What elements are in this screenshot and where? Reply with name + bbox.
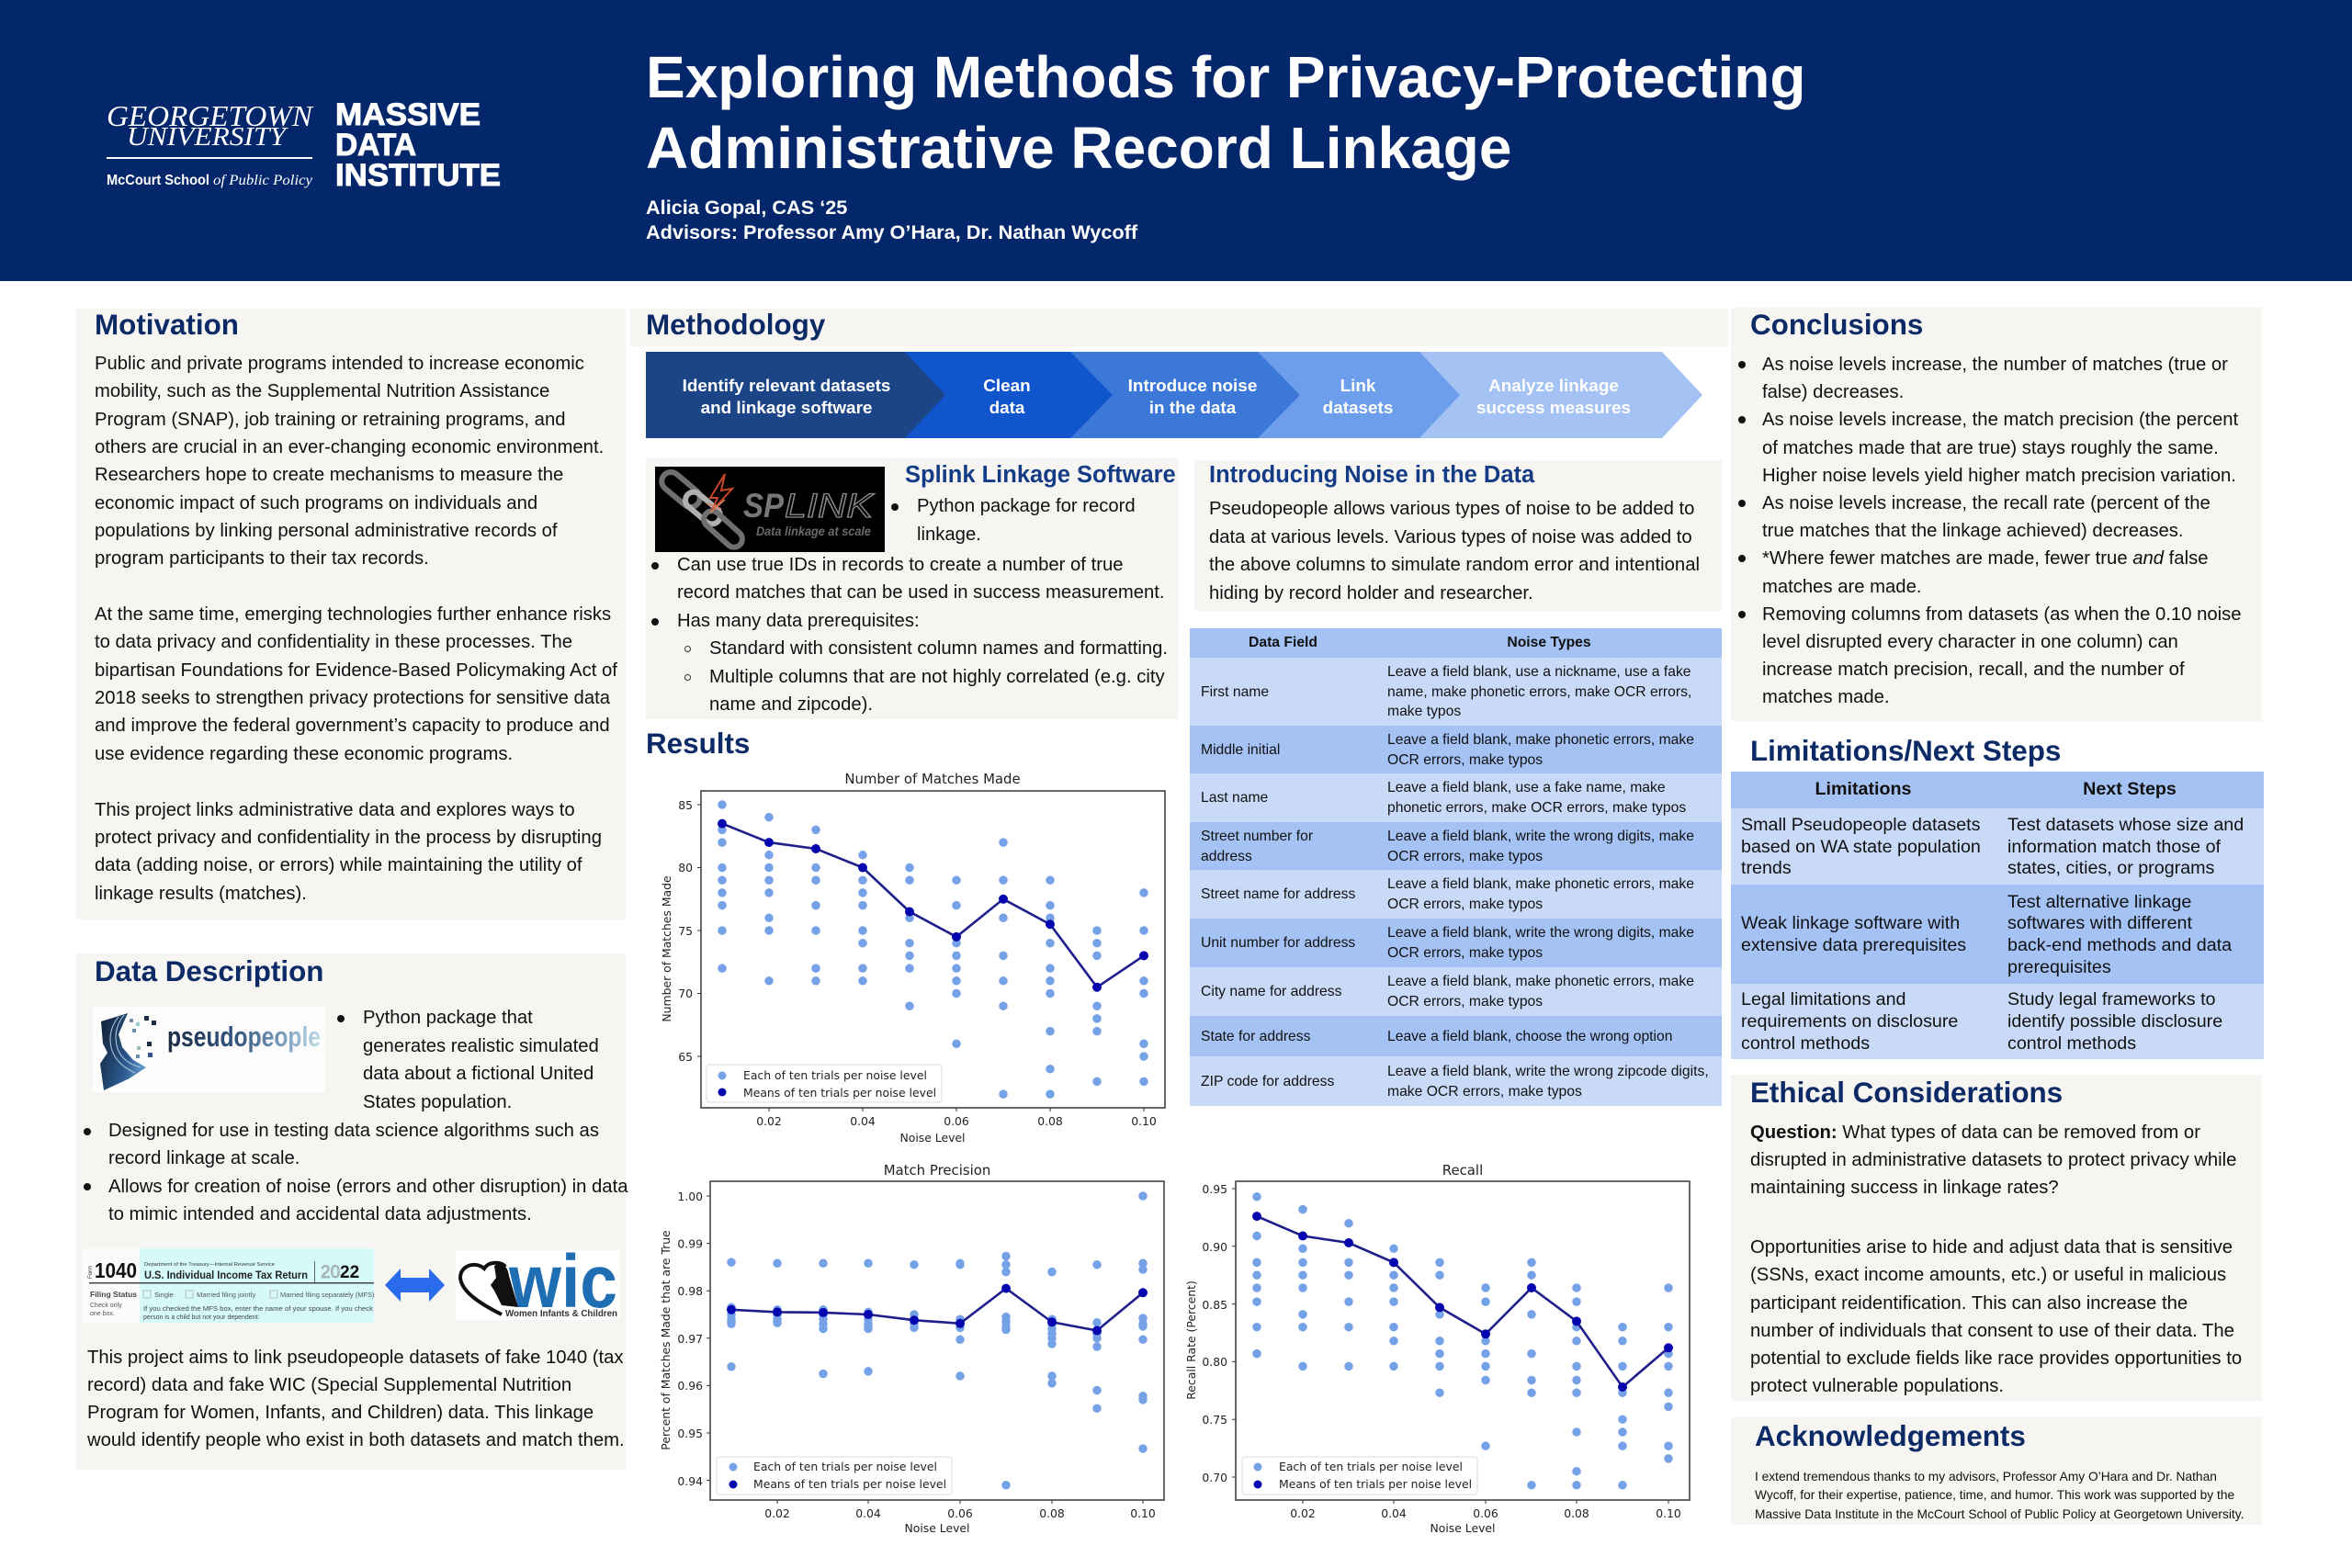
text: acknowledgements: Wycoff, for their expertise, patience, time, and humor. This work was supported by the [1755,1488,2234,1502]
table: limitations and next steps: Limitations [1815,779,1911,799]
image: form 1040: person is a child but not your dependent: [143,1314,260,1321]
bullets: conclusions: matches made. [1762,687,1890,707]
logo: splink [655,467,885,552]
chart: recall: Noise Level [1430,1521,1496,1535]
text: motivation body: Researchers hope to create mechanisms to measure the [95,465,563,485]
chart: match precision: Percent of Matches Made that are True [659,1230,673,1450]
panel: methodology heading [630,309,1728,346]
title: Administrative Record Linkage [646,115,1511,181]
chart: match precision: 0.08 [1039,1506,1065,1520]
table: data fields and noise types: Street name for address [1201,886,1355,902]
chart: match precision: 0.95 [677,1427,703,1440]
text: motivation body: economic impact of such programs on individuals and [95,493,537,513]
panel: acknowledgements [1731,1417,2262,1525]
chart: number of matches made: Means of ten trials per noise level [743,1086,936,1100]
text: research question: maintaining success in linkage rates? [1750,1178,2059,1198]
bullets: conclusions: Higher noise levels yield higher match precision variation. [1762,466,2236,486]
bullets: splink features [651,555,1168,715]
image: form 1040: Filing Status [90,1290,137,1299]
chart: match precision: Each of ten trials per noise level [753,1460,937,1473]
panel: data description [76,953,626,1470]
table: limitations and next steps: prerequisites [2007,957,2111,977]
table: data fields and noise types: Leave a field blank, write the wrong digits, make [1387,925,1694,941]
table: limitations and next steps: Legal limitations and [1741,989,1905,1010]
chart: match precision: 1.00 [677,1190,703,1203]
table: data fields and noise types [1190,628,1722,1106]
text: noise description [1209,499,1700,603]
bullets: conclusions: increase match precision, recall, and the number of [1762,660,2185,680]
text: research question: Question: What types of data can be removed from or [1750,1122,2200,1143]
text: noise description: data at various levels. Various types of noise was added to [1209,527,1692,547]
title [646,44,1805,181]
heading: introducing noise: Introducing Noise in the Data [1209,462,1534,488]
chart: number of matches made: Number of Matches Made [844,771,1021,787]
text: acknowledgements [1755,1470,2244,1521]
bullets: conclusions [1738,355,2242,707]
bullets: uses of pseudopeople: to mimic intended and accidental data adjustments. [108,1204,532,1224]
chart: number of matches made [660,771,1166,1145]
bullet: python package: generates realistic simulated [363,1036,599,1056]
chart: number of matches made: 85 [678,798,693,812]
text: research question: disrupted in administrative datasets to protect privacy while [1750,1150,2236,1170]
text: noise description: the above columns to simulate random error and intentional [1209,555,1700,575]
chart: recall: 0.85 [1202,1298,1227,1312]
table: data fields and noise types: Leave a field blank, make phonetic errors, make [1387,732,1694,748]
logo: WIC [456,1250,619,1320]
logo: Georgetown McCourt School and Massive Data Institute: MASSIVE [335,97,481,132]
table: data fields and noise types: OCR errors, make typos [1387,849,1543,863]
chart: match precision: 0.04 [855,1506,881,1520]
panel: introducing noise in the data [1194,460,1722,611]
text: motivation body: bipartisan Foundations for Evidence-Based Policymaking Act of [95,660,617,681]
process flow chevrons [646,352,1702,438]
bullets: conclusions: *Where fewer matches are made, fewer true and false [1762,548,2209,569]
table: limitations and next steps: extensive data prerequisites [1741,935,1966,955]
text: motivation body [95,354,617,904]
chart: recall [1184,1162,1690,1535]
text: acknowledgements: I extend tremendous thanks to my advisors, Professor Amy O’Hara and Dr. Nathan [1755,1470,2217,1483]
heading: methodology: Methodology [646,309,825,341]
bullets: splink features: Can use true IDs in records to create a number of true [677,555,1123,575]
table: limitations and next steps [1731,772,2264,1059]
chart: match precision [659,1162,1165,1535]
text: project aim: This project aims to link pseudopeople datasets of fake 1040 (tax [87,1348,624,1368]
text: opportunities [1750,1237,2242,1396]
text: project aim: record) data and fake WIC (Special Supplemental Nutrition [87,1375,571,1395]
chart: number of matches made: 0.08 [1037,1114,1063,1128]
table: limitations and next steps: Test alternative linkage [2007,892,2191,912]
heading: acknowledgements: Acknowledgements [1755,1420,2026,1452]
heading: splink linkage software: Splink Linkage Software [905,462,1176,488]
bullet: python package: Python package that [363,1008,533,1028]
chart: recall: 0.04 [1381,1506,1407,1520]
bullet: python package: States population. [363,1091,512,1111]
image: form 1040: If you checked the MFS box, enter the name of your spouse. If you check [143,1306,374,1313]
chart: number of matches made: Number of Matches Made [660,875,673,1022]
bullet: python package for record linkage [891,496,1136,544]
image: form 1040: Single [154,1291,174,1299]
text: motivation body: program participants to their tax records. [95,548,429,569]
bullets: conclusions: level disrupted every character in one column) can [1762,632,2178,652]
table: data fields and noise types: Leave a field blank, make phonetic errors, make [1387,974,1694,989]
table: data fields and noise types: Leave a field blank, use a fake name, make [1387,780,1666,795]
bullet: python package for record linkage: linkage. [917,524,981,544]
image: form 1040: 22 [340,1263,359,1282]
process flow chevrons: data [989,399,1025,418]
bullets: splink features: Standard with consistent column names and formatting. [709,638,1168,659]
image: form 1040: Married filing jointly [197,1291,255,1299]
table: data fields and noise types: Leave a field blank, write the wrong zipcode digits, [1387,1064,1709,1079]
title: Exploring Methods for Privacy-Protecting [646,44,1805,110]
text: opportunities: number of individuals that consent to use of their data. The [1750,1321,2234,1341]
chart: recall: 0.95 [1202,1182,1227,1196]
logo: Georgetown McCourt School and Massive Data Institute [107,97,501,193]
chart: recall: Means of ten trials per noise level [1279,1477,1472,1491]
bullets: splink features: Multiple columns that are not highly correlated (e.g. city [709,667,1165,687]
text: motivation body: populations by linking personal administrative records of [95,521,558,541]
bullet: python package: data about a fictional United [363,1064,594,1084]
logo: splink: Data linkage at scale [756,525,871,538]
image: form 1040: Form [88,1266,94,1279]
table: data fields and noise types: Leave a field blank, make phonetic errors, make [1387,876,1694,892]
process flow chevrons: success measures [1476,399,1631,418]
bullets: conclusions: As noise levels increase, the number of matches (true or [1762,355,2228,375]
table: data fields and noise types: State for address [1201,1029,1310,1044]
table: data fields and noise types: Middle initial [1201,742,1280,758]
bullets: conclusions: true matches that the linkage achieved) decreases. [1762,521,2183,541]
table: data fields and noise types: Leave a field blank, write the wrong digits, make [1387,829,1694,844]
bullets: uses of pseudopeople: Allows for creation of noise (errors and other disruption) in data [108,1177,628,1197]
table: data fields and noise types: phonetic errors, make OCR errors, make typos [1387,800,1686,816]
chart: recall: Recall [1442,1162,1483,1179]
heading: ethical considerations: Ethical Considerations [1750,1077,2063,1109]
panel: conclusions [1731,308,2262,721]
table: limitations and next steps: trends [1741,858,1792,878]
chart: match precision: 0.97 [677,1332,703,1346]
table: limitations and next steps: based on WA state population [1741,837,1981,857]
bullets: conclusions: As noise levels increase, the match precision (the percent [1762,410,2238,430]
authors and advisors: Alicia Gopal, CAS ‘25 [646,196,847,219]
chart: number of matches made: 0.06 [944,1114,969,1128]
text: research question [1750,1122,2236,1198]
logo: Georgetown McCourt School and Massive Data Institute: UNIVERSITY [127,122,288,152]
bullets: uses of pseudopeople: Designed for use in testing data science algorithms such as [108,1121,599,1141]
chart: recall: 0.02 [1290,1506,1316,1520]
chart: match precision: 0.10 [1130,1506,1156,1520]
table: data fields and noise types: Noise Types [1507,635,1591,650]
bullets: splink features: record matches that can be used in success measurement. [677,582,1165,603]
text: motivation body: use evidence regarding these economic programs. [95,744,513,764]
image: form 1040: one box. [90,1311,115,1317]
table: limitations and next steps: softwares with different [2007,913,2192,933]
arrow: linkage between datasets [385,1269,445,1302]
text: noise description: Pseudopeople allows various types of noise to be added to [1209,499,1694,519]
table: limitations and next steps: control methods [1741,1033,1870,1054]
chart: match precision: Noise Level [904,1521,970,1535]
authors and advisors [646,196,1137,243]
image: form 1040: Department of the Treasury—Internal Revenue Service [144,1262,275,1268]
chart: number of matches made: 0.10 [1131,1114,1157,1128]
chart: recall: 0.90 [1202,1240,1227,1254]
text: motivation body: to data privacy and confidentiality in these processes. The [95,632,572,652]
heading: results: Results [646,728,750,760]
bullet: python package for record linkage: Python package for record [917,496,1136,516]
chart: recall: Recall Rate (Percent) [1184,1280,1198,1400]
bullets: conclusions: Removing columns from datasets (as when the 0.10 noise [1762,604,2242,625]
bullets: conclusions: matches are made. [1762,577,1921,597]
panel: splink linkage software [646,458,1179,719]
heading: conclusions: Conclusions [1750,309,1923,341]
bullets: splink features: Has many data prerequisites: [677,611,920,631]
table: limitations and next steps: information match those of [2007,837,2221,857]
chart: match precision: 0.96 [677,1379,703,1393]
chart: match precision: Match Precision [884,1162,990,1179]
logo: Georgetown McCourt School and Massive Data Institute: INSTITUTE [335,158,501,193]
text: opportunities: protect vulnerable populations. [1750,1376,2004,1396]
process flow chevrons: Clean [983,377,1031,396]
table: limitations and next steps: states, cities, or programs [2007,858,2214,878]
image: form 1040 [82,1248,374,1323]
table: data fields and noise types: First name [1201,684,1269,700]
text: motivation body: 2018 seeks to strengthen privacy protections for sensitive data [95,688,610,708]
image: form 1040: Married filing separately (MFS) [280,1291,374,1299]
chart: match precision: Means of ten trials per noise level [753,1477,946,1491]
table: data fields and noise types: Unit number for address [1201,935,1355,951]
text: noise description: hiding by record holder and researcher. [1209,582,1533,603]
process flow chevrons: Analyze linkage [1488,377,1619,396]
text: motivation body: Public and private programs intended to increase economic [95,354,584,374]
text: opportunities: (SSNs, exact income amounts, etc.) or useful in malicious [1750,1265,2226,1285]
process flow chevrons: Introduce noise [1128,377,1257,396]
text: motivation body: data (adding noise, or errors) while maintaining the utility of [95,855,582,875]
image: form 1040: U.S. Individual Income Tax Return [144,1270,308,1281]
chart: number of matches made: 75 [678,924,693,938]
heading: data description: Data Description [95,955,323,987]
logo: Georgetown McCourt School and Massive Data Institute: of Public Policy [213,173,313,188]
text: opportunities: Opportunities arise to hide and adjust data that is sensitive [1750,1237,2233,1258]
chart: match precision: 0.99 [677,1237,703,1251]
chart: number of matches made: 70 [678,987,693,1000]
table: data fields and noise types: ZIP code for address [1201,1074,1334,1089]
text: project aim: Program for Women, Infants, and Children) data. This linkage [87,1403,594,1423]
text: motivation body: and improve the federal government’s capacity to produce and [95,716,610,736]
table: data fields and noise types: OCR errors, make typos [1387,994,1543,1010]
process flow chevrons: in the data [1149,399,1237,418]
process flow chevrons: Link [1340,377,1376,396]
text: acknowledgements: Massive Data Institute in the McCourt School of Public Policy at Georgetown University. [1755,1507,2244,1521]
chart: recall: Each of ten trials per noise level [1279,1460,1463,1473]
text: opportunities: participant reidentification. This can also increase the [1750,1293,2188,1314]
text: motivation body: At the same time, emerging technologies further enhance risks [95,604,611,625]
logo: splink: SP [743,487,784,525]
bullet: python package [337,1008,599,1111]
table: limitations and next steps: identify possible disclosure [2007,1011,2222,1032]
bullets: conclusions: of matches made that are true) stays roughly the same. [1762,438,2219,458]
table: data fields and noise types: make typos [1387,704,1461,719]
chart: recall: 0.80 [1202,1355,1227,1369]
chart: number of matches made: 80 [678,861,693,874]
bullets: uses of pseudopeople: record linkage at scale. [108,1148,300,1168]
bullets: conclusions: false) decreases. [1762,382,1904,402]
panel: motivation [76,309,626,919]
image: form 1040: Check only [90,1303,122,1309]
process flow chevrons: Identify relevant datasets [683,377,890,396]
text: motivation body: Program (SNAP), job training or retraining programs, and [95,410,566,430]
header banner [0,0,2352,281]
table: data fields and noise types: Last name [1201,790,1268,806]
logo: Georgetown McCourt School and Massive Data Institute: GEORGETOWN [107,99,314,132]
table: data fields and noise types: City name for address [1201,984,1341,999]
chart: recall: 0.75 [1202,1413,1227,1427]
table: limitations and next steps: control methods [2007,1033,2136,1054]
table: limitations and next steps: back-end methods and data [2007,935,2232,955]
bullets: conclusions: As noise levels increase, the recall rate (percent of the [1762,493,2211,513]
table: limitations and next steps: Small Pseudopeople datasets [1741,815,1981,835]
table: data fields and noise types: OCR errors, make typos [1387,945,1543,961]
text: project aim [87,1348,625,1450]
table: data fields and noise types: OCR errors, make typos [1387,751,1543,768]
chart: number of matches made: 0.04 [850,1114,876,1128]
table: data fields and noise types: Data Field [1249,635,1317,650]
text: motivation body: others are crucial in an ever-changing economic environment. [95,437,604,457]
chart: recall: 0.08 [1564,1506,1589,1520]
text: motivation body: mobility, such as the Supplemental Nutrition Assistance [95,381,549,401]
chart: recall: 0.70 [1202,1471,1227,1484]
table: limitations and next steps: Weak linkage software with [1741,913,1960,933]
text: motivation body: This project links administrative data and explores ways to [95,799,575,819]
chart: number of matches made: Noise Level [899,1131,966,1145]
chart: recall: 0.10 [1656,1506,1681,1520]
table: data fields and noise types: Leave a field blank, use a nickname, use a fake [1387,664,1691,680]
table: limitations and next steps: requirements on disclosure [1741,1011,1958,1032]
logo: splink: LINK [785,487,876,525]
image: form 1040: 1040 [95,1258,137,1282]
image: form 1040: 20 [321,1263,340,1282]
heading: motivation: Motivation [95,309,239,341]
table: data fields and noise types: OCR errors, make typos [1387,897,1543,912]
text: opportunities: potential to exclude fields like race provides opportunities to [1750,1348,2242,1369]
process flow chevrons: and linkage software [701,399,872,418]
table: limitations and next steps: Study legal frameworks to [2007,989,2216,1010]
table: data fields and noise types: name, make phonetic errors, make OCR errors, [1387,684,1691,700]
chart: number of matches made: Each of ten trials per noise level [743,1068,927,1082]
logo: pseudopeople [93,1007,325,1092]
text: motivation body: linkage results (matches). [95,884,307,904]
table: data fields and noise types: address [1201,849,1252,863]
chart: match precision: 0.06 [947,1506,973,1520]
chart: match precision: 0.98 [677,1284,703,1298]
table: data fields and noise types: make OCR errors, make typos [1387,1084,1582,1099]
authors and advisors: Advisors: Professor Amy O’Hara, Dr. Nathan Wycoff [646,220,1137,243]
logo: Georgetown McCourt School and Massive Data Institute: DATA [335,128,416,163]
logo: Georgetown McCourt School and Massive Data Institute: McCourt School [107,173,209,188]
chart: match precision: 0.94 [677,1474,703,1488]
table: data fields and noise types: Leave a field blank, choose the wrong option [1387,1029,1672,1044]
panel: ethical considerations [1731,1075,2262,1401]
bullets: splink features: name and zipcode). [709,694,873,715]
table: data fields and noise types: Street number for [1201,829,1313,844]
chart: number of matches made: 65 [678,1050,693,1064]
chart: number of matches made: 0.02 [756,1114,782,1128]
process flow chevrons: datasets [1323,399,1393,418]
chart: recall: 0.06 [1473,1506,1498,1520]
bullets: uses of pseudopeople [84,1121,628,1224]
heading: limitations and next steps: Limitations/Next Steps [1750,735,2061,767]
text: motivation body: protect privacy and confidentiality in the process by disrupting [95,828,602,848]
table: limitations and next steps: Test datasets whose size and [2007,815,2244,835]
text: project aim: would identify people who exist in both datasets and match them. [87,1430,625,1450]
table: limitations and next steps: Next Steps [2083,779,2177,799]
chart: match precision: 0.02 [764,1506,790,1520]
